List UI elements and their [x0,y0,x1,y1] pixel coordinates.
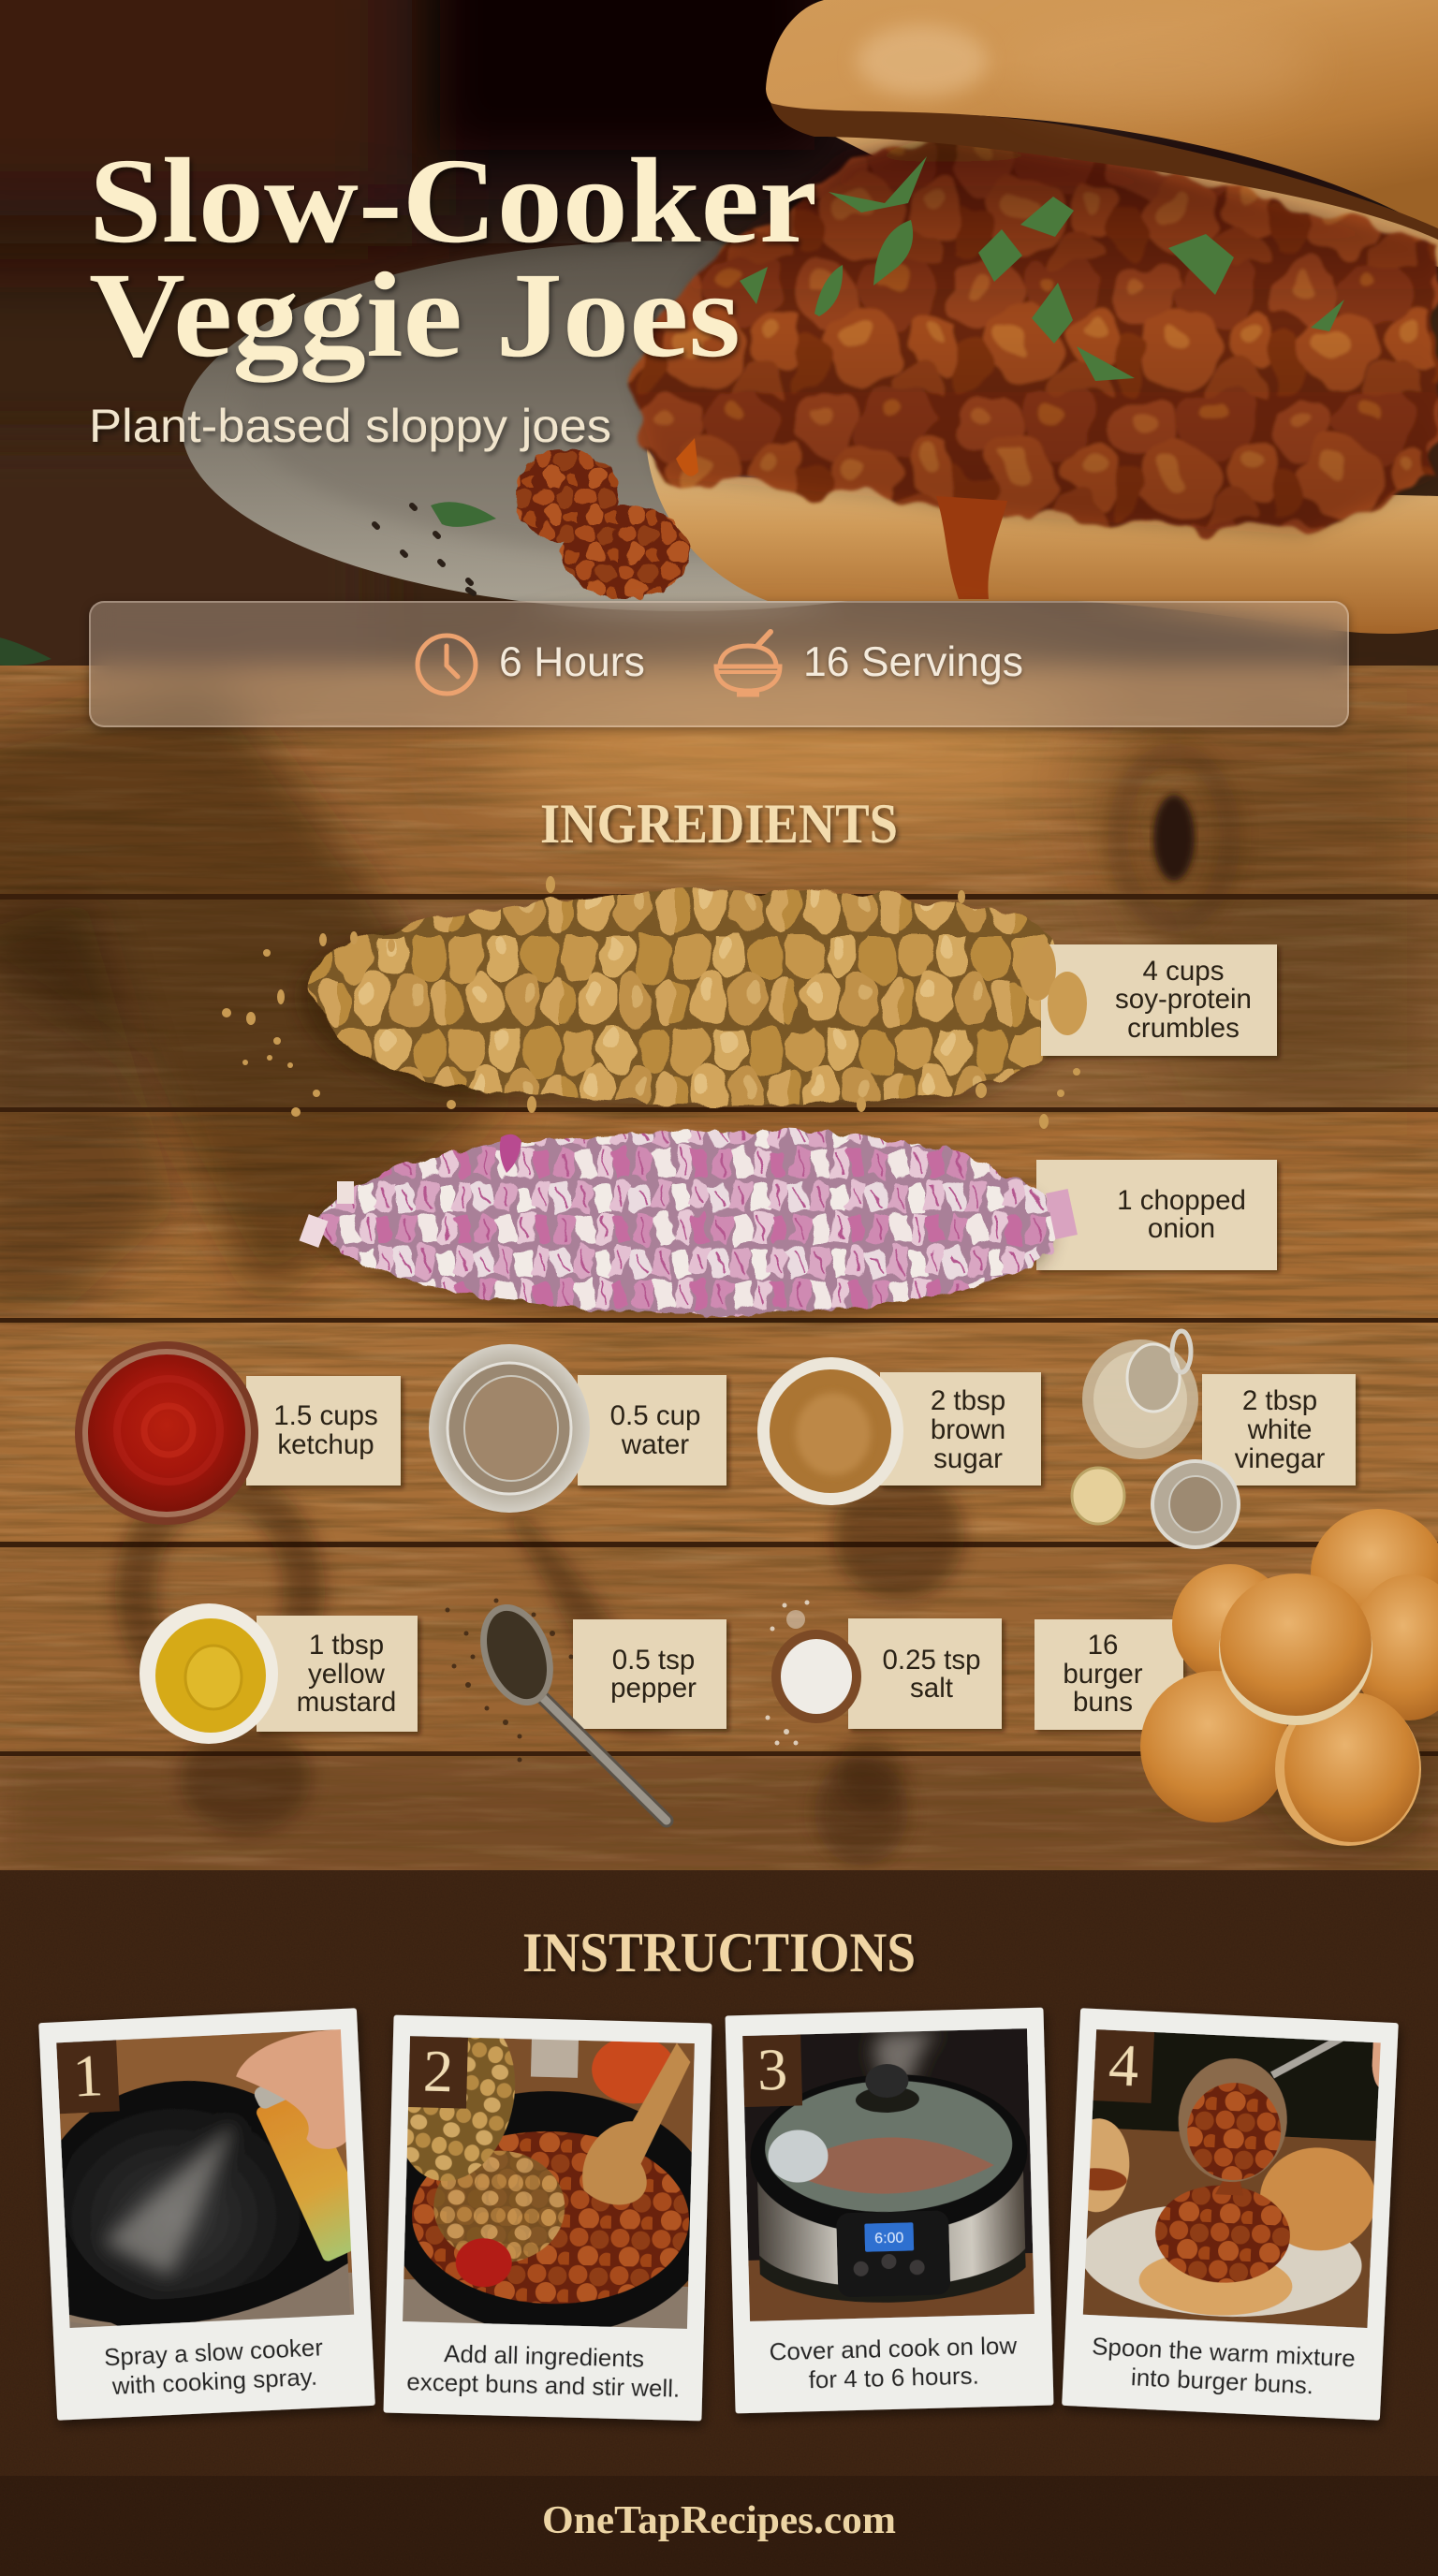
label card [1202,1374,1356,1486]
step 3 photo [742,2028,1034,2326]
onion pile [300,1130,1078,1321]
label card [578,1375,726,1486]
step 3 card [726,2008,1054,2413]
label card: 0.25 tsp [883,1645,980,1676]
ingredient: soy-protein crumbles [222,876,1277,1129]
label card: onion [1148,1213,1215,1244]
instructions section background [0,1870,1438,2476]
label card: yellow [308,1659,386,1690]
title: Slow-Cooker [89,134,817,269]
label card: vinegar [1235,1443,1326,1474]
ingredient: burger buns [1034,1509,1438,1853]
icon: mustard bowl [139,1603,278,1744]
label card: 1.5 cups [273,1400,378,1431]
label card [848,1618,1002,1729]
label card: 16 [1088,1630,1118,1661]
label card: brown [931,1414,1005,1445]
label card [246,1376,401,1486]
step 4 number: 4 [1108,2031,1140,2099]
step 3 caption [769,2331,1018,2394]
label card: pepper [610,1673,697,1704]
ingredient: brown sugar [757,1357,1041,1601]
bottom bun [646,440,1438,634]
step 1 card [27,2008,386,2421]
icon: brown sugar bowl [757,1357,903,1505]
label card [880,1372,1041,1486]
time text: 6 Hours [499,639,645,685]
step 2 caption: except buns and stir well. [406,2367,681,2403]
leaf at table edge [0,637,51,666]
meat filling [624,136,1438,534]
label card: water [621,1429,689,1460]
step 4 card [1054,2008,1399,2421]
label card: sugar [933,1443,1003,1474]
step 2 caption: Add all ingredients [444,2339,644,2373]
icon: vinegar bottle and cap [1072,1331,1239,1547]
subtitle: Plant-based sloppy joes [89,400,611,452]
ingredient: water [429,1344,726,1732]
ingredients heading: INGREDIENTS [540,793,898,855]
step 2 caption [406,2338,681,2403]
step 1 caption: with cooking spray. [110,2363,318,2400]
stats bar [89,601,1349,727]
label card [1041,944,1277,1056]
step 2 number: 2 [422,2037,454,2104]
step 3 caption: Cover and cook on low [769,2331,1018,2365]
salt grains [766,1601,809,1745]
plate [182,241,846,625]
top bun [766,0,1438,234]
wood table background [0,665,1438,1870]
label card: soy-protein [1115,984,1252,1015]
label card [257,1616,418,1732]
label card: crumbles [1127,1013,1240,1044]
step 1 number: 1 [71,2042,105,2110]
icon: bowl [713,629,783,696]
step 3 number: 3 [756,2036,788,2103]
label card: 0.5 cup [610,1400,700,1431]
label card: ketchup [277,1429,374,1460]
step 1 number [56,2040,120,2114]
ingredient: yellow mustard [139,1603,418,1833]
ingredient: salt [766,1601,1002,1811]
label card: 4 cups [1143,956,1224,987]
step 3 photo: 6:00 [874,2231,904,2247]
label card: mustard [297,1687,396,1718]
footer band [0,2476,1438,2576]
ingredient: white vinegar [1072,1331,1356,1547]
label card: salt [910,1673,953,1704]
step 4 photo [1059,2024,1387,2333]
label card: 1 chopped [1117,1185,1246,1216]
step 1 caption: Spray a slow cooker [103,2333,324,2371]
ingredient: chopped onion [300,1130,1277,1321]
title [89,134,817,383]
title: Veggie Joes [89,248,741,383]
step 2 card [373,2001,720,2422]
step 4 caption [1090,2332,1356,2401]
step 1 photo [60,2029,354,2328]
step 3 caption: for 4 to 6 hours. [808,2362,979,2393]
step 2 photo [374,2001,720,2339]
label card: buns [1073,1687,1133,1718]
instructions heading: INSTRUCTIONS [522,1922,916,1983]
label card [1036,1160,1277,1270]
label card: 1 tbsp [309,1630,384,1661]
icon: clock [416,633,477,696]
pepper scatter [446,1599,582,1762]
step 2 number [408,2036,468,2109]
label card: 0.5 tsp [612,1645,695,1676]
bun underside [835,137,1438,267]
label card: burger [1063,1659,1143,1690]
label card [573,1619,726,1729]
step 4 caption: Spoon the warm mixture [1092,2332,1356,2372]
ingredient: ketchup [75,1341,401,1694]
crumbles pile [222,876,1084,1129]
meat chunks on plate [516,449,689,599]
label card [1034,1619,1183,1730]
icon: spoon of pepper [467,1594,667,1821]
ingredient: pepper [446,1594,726,1821]
step 3 number [742,2034,802,2107]
parsley [740,156,1344,381]
step 4 caption: into burger buns. [1130,2363,1314,2399]
footer website: OneTapRecipes.com [542,2499,896,2542]
icon: ketchup bowl [75,1341,258,1525]
icon: glass of water [429,1344,590,1513]
label card: 2 tbsp [1242,1385,1317,1416]
label card: 2 tbsp [931,1385,1005,1416]
icon: pile of buns [1140,1509,1438,1853]
servings text: 16 Servings [803,639,1023,685]
hero photo: sloppy joe on a plate [0,0,1438,721]
step 1 caption [103,2333,325,2400]
step 4 number [1093,2029,1154,2103]
icon: salt bowl [771,1630,861,1723]
edge crumbles [1019,937,1087,1035]
label card: white [1247,1414,1312,1445]
